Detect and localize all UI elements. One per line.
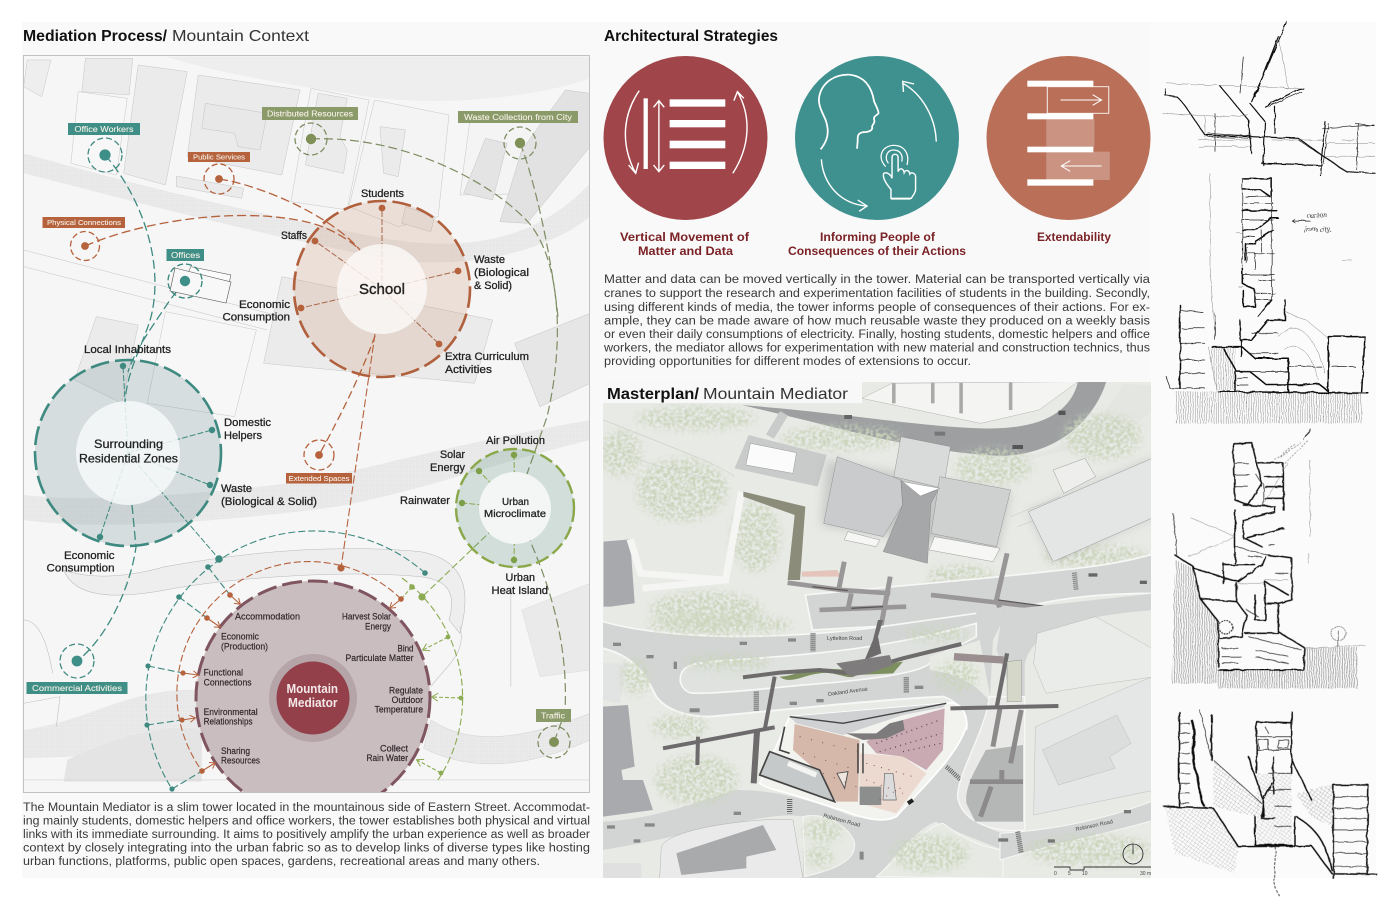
mediator labels: Mountain	[286, 682, 338, 696]
connector: public services to school	[219, 179, 360, 250]
annotation: carbon from city: from city.	[1304, 225, 1332, 234]
sketch panel background	[1151, 22, 1376, 878]
connector: school to mediator	[341, 334, 375, 568]
road names: Robinson Road	[822, 813, 861, 829]
node: traffic	[536, 709, 571, 758]
mediator labels: Economic	[221, 632, 259, 642]
connector: physical connections to school	[85, 215, 360, 250]
caption	[620, 232, 749, 258]
heading: masterplan: Masterplan/	[607, 386, 700, 403]
residential labels: Consumption	[46, 562, 114, 574]
node: distributed resources: Distributed Resources	[267, 108, 353, 118]
node: distributed resources	[262, 107, 358, 155]
connector: office workers to residential	[105, 155, 155, 402]
arc nodes	[144, 555, 463, 792]
microclimate labels: Heat Island	[492, 585, 548, 597]
node: public services: Public Services	[193, 153, 245, 162]
masterplan lower left: roads, bridges and site plan	[603, 607, 1003, 878]
caption: Vertical Movement of	[620, 232, 749, 244]
mediator labels: Relationships	[204, 716, 253, 726]
connector: waste collection	[520, 143, 558, 317]
strategy: vertical movement of matter and data	[604, 56, 768, 258]
scale bar	[1054, 866, 1151, 875]
sketch: section one	[1162, 22, 1375, 175]
scale bar: 5	[1068, 871, 1071, 877]
text block: strategies description: using different kinds of media, the tower informs people of consequences of their actions. For ex-	[604, 302, 1150, 314]
node: waste collection from city	[458, 111, 578, 159]
mediator labels: Outdoor	[392, 695, 423, 705]
icon: sketched tree	[1219, 621, 1346, 647]
arc: teal relationships around mediator	[146, 531, 425, 789]
school labels: Waste	[474, 254, 505, 266]
microclimate labels: Air Pollution	[486, 435, 545, 447]
text block: strategies description: providing opportunities for different modes of extensions to occur.	[604, 356, 971, 368]
strategy: informing people of consequences	[788, 56, 966, 258]
mediator labels: Sharing	[221, 746, 250, 756]
scale bar: 30 m	[1140, 871, 1151, 877]
caption: Consequences of their Actions	[788, 246, 966, 258]
text block: strategies description: Matter and data can be moved vertically in the tower. Material can be transported vertically via	[604, 274, 1151, 286]
residential labels: Local Inhabitants	[84, 344, 172, 356]
microclimate labels: Urban	[506, 572, 535, 584]
node: traffic: Traffic	[541, 710, 566, 720]
node: office workers	[68, 123, 140, 172]
panel: masterplan	[600, 382, 1155, 878]
text block: strategies description: or even their daily consumptions of electricity. Finally, hosting students, domestic helpers and office	[604, 329, 1150, 341]
circle: urban microclimate	[456, 449, 574, 567]
text block: strategies description	[603, 274, 1151, 368]
residential labels: Domestic	[224, 417, 272, 429]
mediator labels: Mediator	[288, 696, 338, 710]
scale bar: 10	[1082, 871, 1088, 877]
caption: Matter and Data	[638, 246, 734, 258]
node: physical connections: Physical Connections	[47, 218, 121, 227]
connector: residential to commercial activities	[77, 505, 136, 661]
residential labels	[46, 344, 317, 574]
circle: school	[294, 201, 470, 377]
masterplan upper half	[600, 382, 1155, 633]
sketch: section three	[1172, 440, 1365, 688]
mediator labels: Energy	[365, 622, 391, 632]
mediator labels: Particulate Matter	[346, 653, 414, 663]
mediator labels: Regulate	[389, 686, 423, 696]
text block: project description: urban functions, platforms, public open spaces, gardens, recreational areas and many others.	[23, 856, 540, 868]
school labels: Students	[361, 188, 404, 200]
node: physical connections	[42, 217, 125, 260]
caption: Informing People of	[820, 232, 935, 244]
caption	[788, 232, 966, 258]
school labels: Consumption	[222, 312, 290, 324]
arc: green relationships around mediator	[401, 578, 463, 780]
road names: Lyttelton Road	[827, 636, 862, 642]
connector: school to extended spaces	[319, 336, 375, 455]
heading: masterplan: Mountain Mediator	[703, 386, 849, 403]
microclimate labels: Urban	[502, 497, 529, 508]
mediator labels: Harvest Solar	[342, 612, 391, 622]
mediator labels: Rain Water	[366, 753, 408, 763]
road names: Robinson Road	[1075, 819, 1114, 833]
node: offices	[166, 249, 231, 303]
node: commercial activities	[26, 644, 128, 694]
school labels: Activities	[445, 364, 493, 376]
microclimate labels: Microclimate	[484, 509, 546, 520]
mediator labels: Accommodation	[235, 612, 300, 622]
residential labels: Surrounding	[94, 437, 163, 451]
residential labels: Economic	[64, 550, 115, 562]
heading: architectural strategies: Architectural Strategies	[604, 28, 778, 45]
heading: mediation process	[23, 28, 310, 45]
node: offices: Offices	[171, 250, 200, 260]
road names	[822, 636, 1114, 833]
sketch: section two with tower	[1165, 173, 1368, 440]
node: waste collection from city: Waste Collection from City	[464, 112, 573, 122]
node: commercial activities: Commercial Activities	[32, 683, 122, 693]
north arrow	[1123, 844, 1143, 864]
icon: head and touch hand	[819, 75, 936, 211]
masterplan lower right	[950, 593, 1155, 866]
mediator labels: Functional	[204, 668, 243, 678]
text block: strategies description: ample, they can be made aware of how much reusable waste they produced on a weekly basis	[604, 316, 1150, 328]
text block: project description: The Mountain Mediator is a slim tower located in the mountainous side of Eastern Street. Accommodat-	[23, 802, 590, 814]
scale bar: 0	[1054, 871, 1057, 877]
mediator labels: Environmental	[204, 707, 258, 717]
school labels	[222, 188, 529, 376]
icon: extending floors	[1027, 81, 1110, 186]
connector: microclimate to mediator	[422, 508, 515, 597]
text block: project description	[23, 802, 590, 868]
road names: Oakland Avenue	[827, 686, 868, 698]
panel: mediation process map	[24, 56, 590, 815]
node: public services	[188, 152, 250, 194]
node: extended spaces	[286, 440, 352, 484]
caption: Extendability	[1037, 232, 1112, 244]
connector: offices to residential	[128, 281, 185, 372]
icon: vertical movement	[625, 91, 747, 173]
connector: distributed resources to microclimate	[311, 139, 557, 508]
mediator labels: Temperature	[374, 704, 423, 714]
mediator labels	[204, 612, 423, 766]
mediator labels: (Production)	[221, 642, 268, 652]
annotation: carbon from city: carbon	[1307, 210, 1328, 219]
school labels: School	[359, 281, 405, 298]
microclimate labels: Energy	[430, 462, 465, 474]
school labels: & Solid)	[474, 280, 512, 292]
text block: project description: ing mainly students, domestic helpers and office workers, the tower establishes both physical and virtual	[23, 816, 590, 828]
microclimate labels	[400, 435, 548, 597]
school labels: Economic	[239, 299, 291, 311]
school labels: Staffs	[281, 230, 307, 242]
residential labels: Helpers	[224, 430, 262, 442]
residential labels: Residential Zones	[79, 452, 178, 466]
heading: mediation process: Mountain Context	[172, 28, 310, 45]
heading: mediation process: Mediation Process/	[23, 28, 168, 45]
school labels: Extra Curriculum	[445, 351, 529, 363]
microclimate labels: Rainwater	[400, 495, 450, 507]
annotation: carbon from city	[1292, 210, 1332, 234]
text block: project description: context by closely integrating into the urban fabric so as to develop links of diverse types like hosting	[23, 842, 590, 854]
mediator labels: Connections	[204, 678, 252, 688]
mediator labels: Collect	[380, 744, 409, 754]
heading: masterplan	[603, 382, 862, 403]
circle: mountain mediator	[196, 581, 430, 815]
mediator labels: Bind	[398, 644, 414, 654]
residential labels: Waste	[221, 483, 252, 495]
school labels: (Biological	[474, 267, 529, 279]
connector: traffic to microclimate	[515, 508, 565, 742]
sketch: section four	[1164, 710, 1377, 897]
text block: project description: links with its immediate surrounding. It aims to positively amplify the urban experience as well as broader	[23, 829, 590, 841]
residential labels: (Biological & Solid)	[221, 496, 317, 508]
strategy: extendability	[986, 56, 1150, 244]
mediator labels: Resources	[221, 756, 260, 766]
microclimate labels: Solar	[440, 449, 465, 461]
text block: strategies description: workers, the mediator allows for experimentation with new material and construction technics, thus	[603, 342, 1150, 354]
node: office workers: Office Workers	[74, 124, 134, 134]
arc: orange relationships around mediator	[177, 562, 401, 771]
circle: surrounding residential zones	[35, 360, 221, 559]
node: extended spaces: Extended Spaces	[288, 474, 350, 483]
text block: strategies description: cranes to support the research and experimentation facilities of students in the building. Secondly,	[604, 288, 1150, 300]
